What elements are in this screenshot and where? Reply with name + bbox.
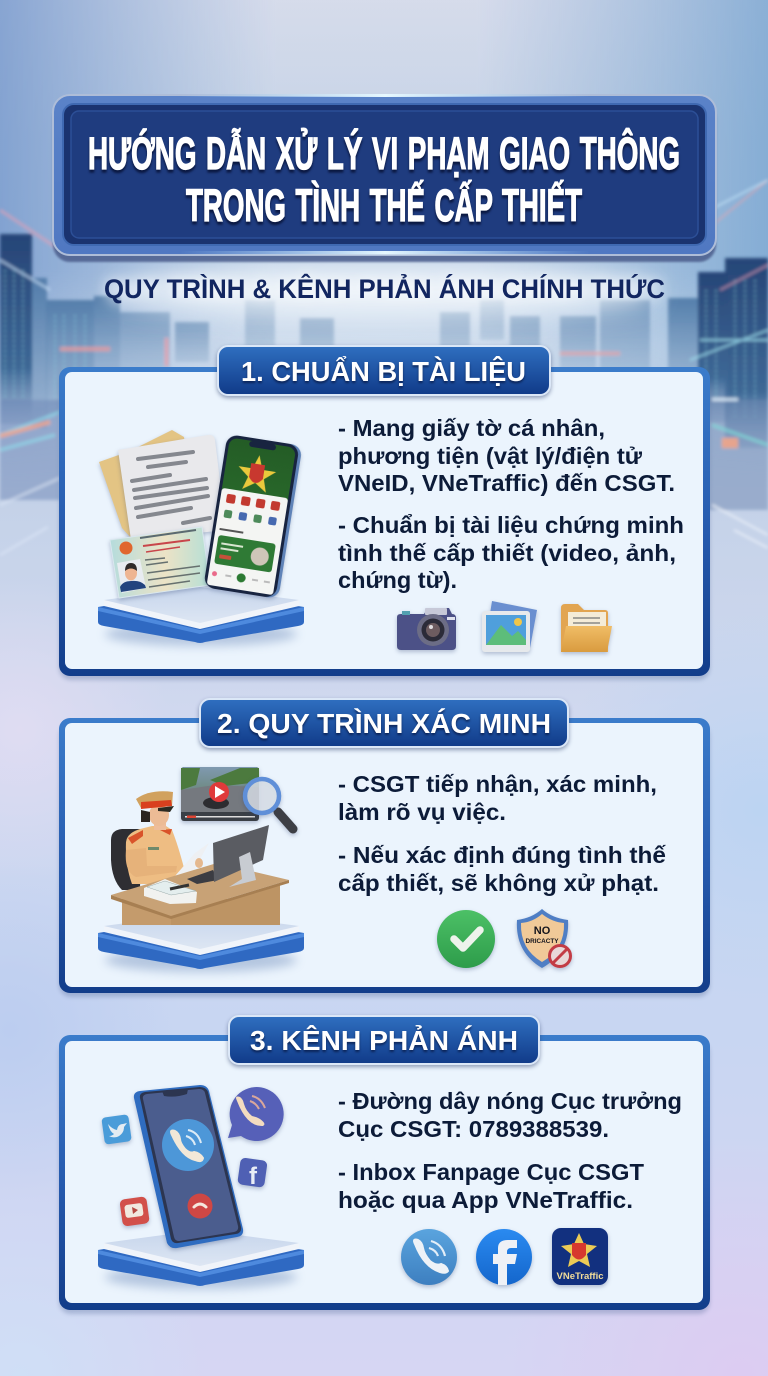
text block: verification steps: - Nếu xác định đúng tình thế — [338, 842, 667, 868]
text block: reporting channels: - Đường dây nóng Cục trưởng — [338, 1088, 682, 1114]
icon: twitter square — [101, 1114, 132, 1145]
icon: no-penalty shield: NO — [534, 925, 551, 937]
icon: facebook square — [237, 1157, 268, 1190]
subtitle: QUY TRÌNH & KÊNH PHẢN ÁNH CHÍNH THỨC — [104, 272, 665, 304]
text block: reporting channels: - Inbox Fanpage Cục CSGT — [338, 1159, 645, 1185]
text block: reporting channels: Cục CSGT: 0789388539. — [338, 1116, 609, 1142]
text block: verification steps: cấp thiết, sẽ không xử phạt. — [338, 870, 659, 896]
icon: VNeTraffic app — [552, 1228, 608, 1285]
section heading tab 2 — [200, 699, 568, 747]
icon: desk with monitor — [111, 825, 289, 925]
icon: camera — [397, 608, 456, 650]
icon: phone with incoming call — [134, 1085, 243, 1248]
text block: verification steps: - CSGT tiếp nhận, xác minh, — [338, 771, 657, 797]
icon: VNeTraffic app: VNeTraffic — [556, 1271, 604, 1282]
panel: 3. reporting channels — [59, 1016, 710, 1314]
icon: facebook circle — [476, 1229, 532, 1285]
icon: folder — [561, 604, 612, 652]
section heading tab 3: 3. KÊNH PHẢN ÁNH — [250, 1024, 518, 1056]
text block: preparation steps — [338, 415, 684, 593]
text block: preparation steps: - Mang giấy tờ cá nhân, — [338, 415, 605, 441]
icon: video evidence screen — [181, 767, 259, 821]
icon: phone with VNeTraffic app — [203, 434, 303, 599]
icon: no-penalty shield — [517, 909, 570, 968]
icon: no-penalty shield: DRICACTY — [526, 938, 559, 945]
platform — [98, 913, 304, 972]
section heading tab 1: 1. CHUẨN BỊ TÀI LIỆU — [241, 356, 526, 387]
icon: folder behind paper — [99, 430, 190, 538]
icon: magnifying glass — [245, 779, 293, 829]
icon: citizen ID card — [110, 527, 210, 598]
text block: verification steps — [338, 771, 667, 896]
panel: 2. verification process — [59, 699, 710, 997]
icon: document page — [118, 435, 226, 540]
illustration: traffic police officer — [111, 791, 209, 890]
text block: verification steps: làm rõ vụ việc. — [338, 799, 506, 825]
platform — [98, 1230, 304, 1289]
icon: photos — [482, 601, 537, 652]
title text — [88, 128, 680, 231]
text block: reporting channels: hoặc qua App VNeTraffic. — [338, 1187, 633, 1213]
section heading tab 1 — [218, 346, 550, 395]
icon: facebook square: f — [249, 1163, 258, 1190]
icon: green check — [437, 910, 495, 968]
platform — [98, 587, 304, 646]
text block: reporting channels — [338, 1088, 682, 1213]
text block: preparation steps: tình thế cấp thiết (video, ảnh, — [338, 540, 676, 566]
text block: preparation steps: VNeID, VNeTraffic) đến CSGT. — [338, 470, 675, 496]
text block: preparation steps: chứng từ). — [338, 567, 457, 593]
section heading tab 3 — [229, 1016, 539, 1064]
section heading tab 2: 2. QUY TRÌNH XÁC MINH — [217, 708, 551, 739]
title banner — [53, 94, 716, 262]
icon: youtube square — [119, 1196, 150, 1227]
text block: preparation steps: phương tiện (vật lý/điện tử — [338, 443, 643, 469]
panel: 1. prepare documents — [59, 346, 710, 680]
icon: call chat bubble — [228, 1087, 284, 1141]
text block: preparation steps: - Chuẩn bị tài liệu chứng minh — [338, 512, 684, 538]
icon: hotline circle — [401, 1229, 457, 1285]
